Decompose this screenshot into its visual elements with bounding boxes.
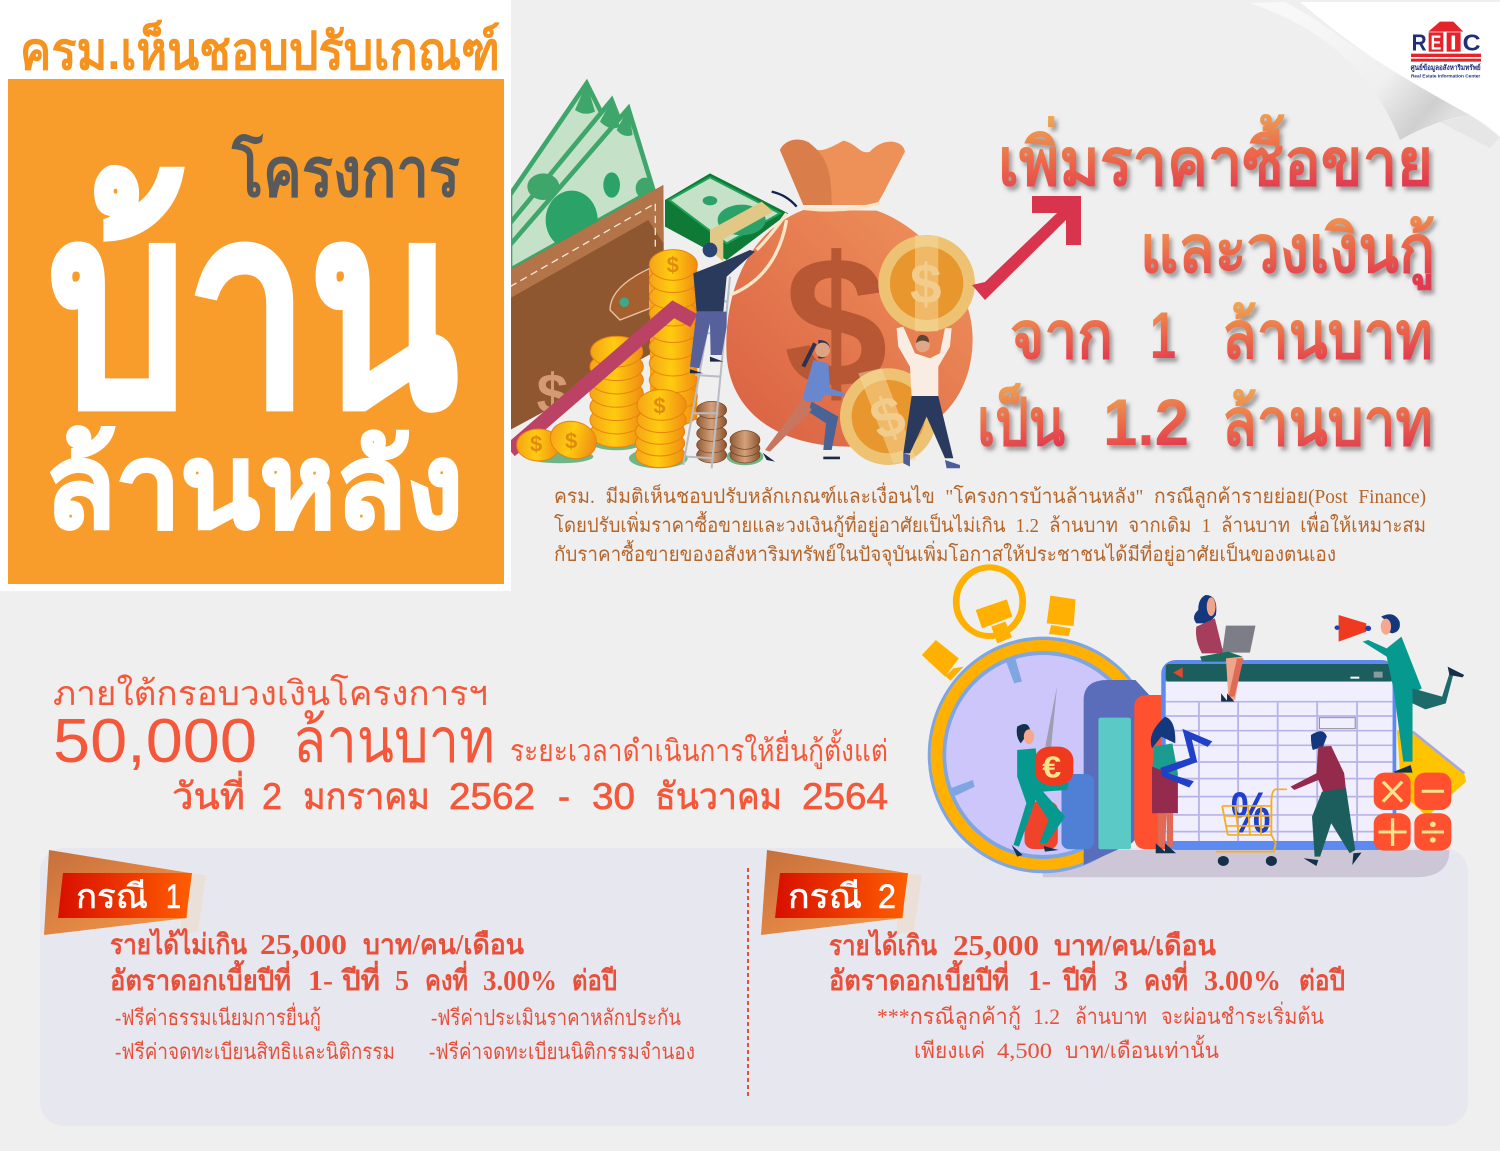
coin shadows	[527, 433, 763, 468]
coins: $	[910, 253, 941, 316]
note line 1: ***กรณีลูกค้ากู้	[877, 1004, 1021, 1030]
rate line: ปีที่	[340, 960, 380, 997]
credit line block: 2	[262, 776, 282, 817]
coin dollar marks: $	[565, 428, 577, 453]
coin dollar marks: $	[530, 432, 542, 457]
note line 1: 1.2	[1033, 1004, 1060, 1029]
rate line: อัตราดอกเบี้ยปีที่	[110, 959, 291, 997]
case 1 text: -ฟรีค่าประเมินราคาหลักประกัน	[431, 1005, 681, 1030]
credit line block: -	[558, 776, 570, 817]
copper coin stacks	[697, 401, 760, 463]
left hero panel	[0, 0, 511, 591]
credit line block: 50,000	[53, 707, 257, 776]
tag: case 2: กรณี	[788, 878, 862, 916]
rate line: ต่อปี	[572, 965, 617, 997]
note line 2	[914, 1035, 1219, 1063]
figure: woman pushing coin	[763, 340, 845, 462]
case 1 text: -ฟรีค่าธรรมเนียมการยื่นกู้	[115, 1002, 321, 1031]
rate line	[829, 959, 1345, 997]
title: ครม.เห็นชอบปรับเกณฑ์	[20, 20, 500, 81]
income line: บาท/คน/เดือน	[363, 930, 524, 961]
figure: man with euro	[1012, 724, 1073, 857]
income line: บาท/คน/เดือน	[1054, 931, 1216, 962]
credit line block: 30	[592, 776, 635, 817]
income line: รายได้เกิน	[829, 929, 937, 962]
rate line: 3	[1114, 966, 1128, 997]
note line 2: บาท/เดือนเท่านั้น	[1065, 1035, 1219, 1063]
note line 1: ล้านบาท	[1075, 1004, 1147, 1029]
tag: case 2: 2	[878, 878, 896, 916]
credit line block: ภายใต้กรอบวงเงินโครงการฯ	[53, 674, 488, 713]
figure: man with megaphone	[1335, 614, 1464, 773]
spreadsheet	[1161, 660, 1396, 850]
REIC logo: ศูนย์ข้อมูลอสังหาริมทรัพย์	[1411, 63, 1481, 73]
tag: case 2	[761, 850, 922, 935]
credit line block: ระยะเวลาดำเนินการให้ยื่นกู้ตั้งแต่	[510, 729, 888, 769]
line 3: จาก	[1010, 298, 1113, 372]
credit line block: 2564	[802, 776, 888, 817]
credit line block: วันที่	[172, 770, 245, 817]
figure: woman with laptop	[1194, 595, 1255, 702]
figure: man climbing	[690, 243, 755, 373]
coin dollar marks	[530, 253, 679, 457]
rate line	[110, 959, 617, 997]
tag: case 1: กรณี	[76, 878, 148, 916]
stopwatch	[922, 567, 1158, 873]
gold coin stacks	[590, 250, 697, 447]
money bag: $	[784, 218, 888, 427]
shopping cart: %	[1231, 781, 1271, 846]
banknotes	[510, 83, 654, 270]
coins	[840, 235, 975, 465]
case 1 text: -ฟรีค่าจดทะเบียนนิติกรรมจำนอง	[429, 1039, 695, 1064]
intro paragraph: ครม. มีมติเห็นชอบปรับหลักเกณฑ์และเงื่อนไข "โครงการบ้านล้านหลัง" กรณีลูกค้ารายย่อย(Post Finance)	[554, 482, 1426, 509]
line 3: ล้านบาท	[1222, 298, 1433, 372]
coins: $	[862, 383, 914, 453]
REIC logo: R	[1412, 30, 1427, 56]
credit line block: 2562	[449, 776, 535, 817]
folder and calculator	[1374, 730, 1466, 851]
page curl corner	[1250, 2, 1500, 148]
tag: case 1: 1	[166, 878, 181, 916]
headline: price raise	[977, 113, 1435, 459]
wallet: $	[537, 363, 568, 426]
line 4	[977, 382, 1433, 459]
income line: รายได้ไม่เกิน	[110, 928, 247, 961]
REIC logo	[1411, 22, 1481, 78]
rate line: ต่อปี	[1299, 965, 1345, 997]
note line 1	[877, 1001, 1324, 1030]
illustration: money, wallet and bag	[510, 83, 975, 468]
rate line: 3.00%	[1204, 966, 1281, 997]
rate line: ปีที่	[1061, 960, 1097, 997]
REIC logo: Real Estate Information Center	[1411, 73, 1480, 78]
shopping cart	[1216, 781, 1287, 866]
income line: 25,000	[953, 931, 1039, 962]
coin dollar marks: $	[653, 393, 666, 418]
illustration: timer, spreadsheet and people	[922, 567, 1466, 877]
case 1 text: -ฟรีค่าจดทะเบียนสิทธิและนิติกรรม	[115, 1039, 395, 1064]
rising arrow	[510, 309, 694, 451]
figure: man with shopping cart	[1291, 731, 1362, 866]
big word: million units: ล้านหลัง	[45, 421, 463, 553]
line 2: และวงเงินกู้	[1140, 212, 1435, 291]
line 3	[1010, 298, 1433, 372]
rate line: 5	[395, 966, 409, 997]
rate line: 1-	[308, 966, 333, 997]
rate line: 1-	[1028, 966, 1051, 997]
line 4: 1.2	[1103, 385, 1189, 459]
tag: case 1	[44, 850, 206, 935]
note line 2: เพียงแค่	[914, 1038, 985, 1063]
floor shadow	[1039, 850, 1449, 877]
front coin stacks	[517, 390, 686, 468]
figure: man with euro: €	[1042, 750, 1061, 784]
rate line: อัตราดอกเบี้ยปีที่	[829, 959, 1009, 997]
bars	[1025, 680, 1169, 865]
project label: โครงการ	[231, 133, 460, 211]
intro paragraph: กับราคาซื้อขายของอสังหาริมทรัพย์ในปัจจุบันเพิ่มโอกาสให้ประชาชนได้มีที่อยู่อาศัยเป็นของตนเอง	[554, 540, 1336, 567]
money bag	[726, 140, 973, 447]
growth arrow	[972, 196, 1081, 300]
rate line: คงที่	[1144, 960, 1188, 997]
income line: 25,000	[260, 930, 347, 961]
income line	[829, 929, 1216, 962]
orange block	[8, 79, 504, 584]
REIC logo: E	[1431, 31, 1441, 54]
credit line block	[53, 674, 888, 817]
ladder	[683, 277, 730, 468]
rate line: 3.00%	[483, 966, 557, 997]
intro paragraph	[554, 482, 1426, 567]
line 3: 1	[1150, 298, 1176, 372]
cash stack	[665, 173, 788, 262]
note line 2: 4,500	[997, 1038, 1052, 1063]
figure: woman with letter	[1151, 717, 1211, 853]
REIC logo: I	[1450, 31, 1457, 54]
figure: man lifting coin	[897, 327, 960, 468]
REIC logo: C	[1463, 30, 1481, 56]
coin dollar marks: $	[667, 253, 679, 278]
intro paragraph: โดยปรับเพิ่มราคาซื้อขายและวงเงินกู้ที่อยู่อาศัยเป็นไม่เกิน 1.2 ล้านบาท จากเดิม 1 ล้านบาท เพื่อให้เหมาะสม	[554, 511, 1426, 538]
line 4: เป็น	[977, 382, 1065, 459]
rate line: คงที่	[425, 960, 468, 997]
line 4: ล้านบาท	[1222, 385, 1433, 459]
panel: cases	[40, 848, 1468, 1126]
credit line block: ล้านบาท	[293, 707, 495, 776]
big word: house: บ้าน	[48, 153, 459, 465]
wallet	[510, 185, 664, 430]
case 1 text	[110, 928, 695, 1064]
line 1: เพิ่มราคาซื้อขาย	[998, 113, 1433, 199]
case 2 text	[829, 929, 1345, 1063]
credit line block: มกราคม	[303, 776, 430, 817]
note line 1: จะผ่อนชำระเริ่มต้น	[1161, 1001, 1324, 1029]
income line	[110, 928, 524, 961]
credit line block: ธันวาคม	[655, 776, 782, 817]
